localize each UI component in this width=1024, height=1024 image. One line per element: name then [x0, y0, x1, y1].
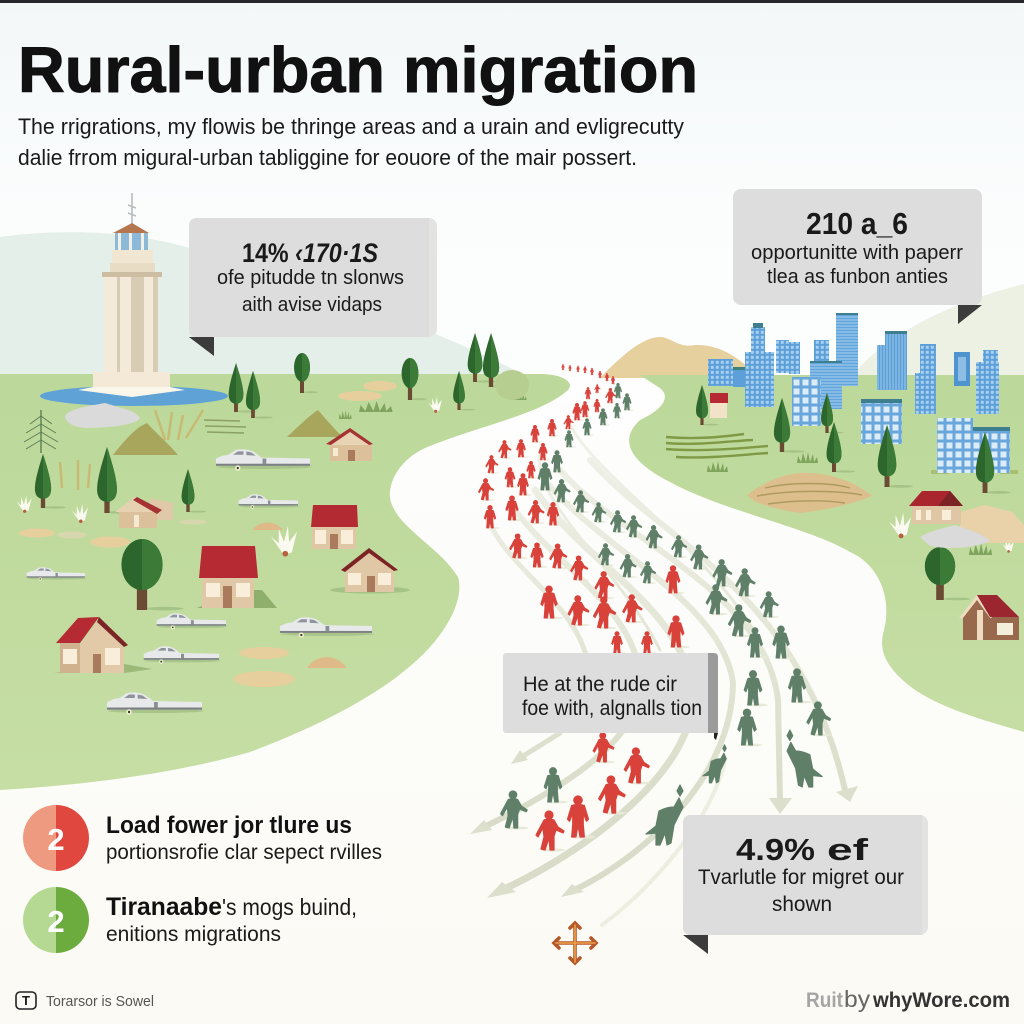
- top edge bar: [0, 0, 1024, 3]
- city trees: [696, 385, 1011, 600]
- legend: green text: 's mogs buind,: [222, 894, 357, 920]
- left pale hill: [0, 232, 530, 378]
- house gable left: [54, 617, 152, 673]
- right pale hill: [850, 284, 1024, 378]
- red migrants group: [478, 364, 690, 852]
- callout: rural stat: 14% ‹170·1S: [242, 238, 378, 268]
- footer brand: by: [844, 986, 871, 1012]
- legend: green marker: 2: [47, 904, 65, 939]
- rural trees: [35, 333, 514, 610]
- legend: green text: enitions migrations: [106, 923, 281, 946]
- large shrub: [495, 370, 529, 400]
- subtitle: [18, 114, 684, 170]
- tower shaft: [78, 250, 185, 397]
- hay piles: [113, 410, 343, 455]
- callout: rural stat: [189, 218, 437, 356]
- house small city: [710, 393, 728, 418]
- house small gable: [326, 428, 373, 461]
- callout: urban stat: tlea as funbon anties: [767, 266, 948, 288]
- house red roof large: [197, 546, 277, 608]
- footer brand: [806, 986, 1010, 1012]
- callout: mid flow note: [503, 653, 718, 740]
- house red roof medium: [311, 505, 358, 549]
- tower pool: [40, 386, 228, 406]
- arrow heads: [470, 750, 858, 898]
- legend: green marker: [23, 887, 89, 953]
- callout: urban stat: [733, 189, 982, 324]
- grey boulder city: [920, 525, 990, 548]
- legend: red text: Load fower jor tlure us: [106, 812, 352, 839]
- grey boulder: [65, 403, 140, 428]
- grass tufts and sprouts: [16, 393, 527, 557]
- footer brand: Ruit: [806, 989, 843, 1012]
- footer source icon: [16, 992, 36, 1009]
- tower lantern: [113, 223, 149, 250]
- urban green land: [629, 375, 1024, 732]
- reeds: [60, 410, 203, 490]
- callout: urban stat: 210 a_6: [806, 206, 908, 241]
- callout: destination stat: Tvarlutle for migret our: [698, 866, 904, 889]
- footer source text: Torarsor is Sowel: [46, 993, 154, 1010]
- green migrants group: [501, 383, 831, 845]
- legend: red text: portionsrofie clar sepect rvilles: [106, 841, 382, 864]
- legend: red marker: [23, 805, 89, 871]
- callout: destination stat: 4.9%: [736, 832, 815, 867]
- fern tree: [24, 410, 58, 453]
- tan distant hill: [600, 337, 760, 378]
- footer source icon: T: [22, 993, 30, 1008]
- legend: green text: Tiranaabe: [106, 893, 222, 921]
- house tan: [115, 497, 173, 528]
- green terraces: [666, 434, 768, 457]
- tower spire: [128, 193, 136, 224]
- grass tufts city: [707, 452, 1014, 555]
- orange cross marker: [554, 923, 596, 963]
- rural green land: [0, 374, 570, 790]
- legend: green text: [106, 893, 357, 946]
- tan rock: [960, 505, 1024, 543]
- city buildings: [708, 313, 1018, 474]
- subtitle: dalie frrom migural-urban tabliggine for eouore of the mair possert.: [18, 145, 637, 170]
- legend: red marker: 2: [47, 822, 65, 857]
- callout: mid flow note: foe with, algnalls tion: [522, 697, 702, 720]
- house gable right: [330, 548, 410, 594]
- tan terraced field: [747, 473, 872, 513]
- tower landmark: [40, 193, 228, 406]
- callout: destination stat: shown: [772, 893, 832, 916]
- callout: rural stat: aith avise vidaps: [242, 294, 382, 316]
- callout: destination stat: ef: [827, 832, 869, 867]
- callout: rural stat: ofe pitudde tn slonws: [217, 267, 404, 289]
- crop lines: [204, 420, 246, 433]
- rural cars: [27, 449, 374, 715]
- legend: red text: [106, 812, 382, 864]
- callout: destination stat: [683, 815, 928, 954]
- house red roof city right: [909, 491, 963, 524]
- callout: mid flow note: He at the rude cir: [523, 673, 677, 696]
- house brown: [959, 595, 1019, 640]
- migration flow arrows: [482, 425, 845, 925]
- callout: urban stat: opportunitte with paperr: [751, 242, 963, 264]
- subtitle: The rrigrations, my flowis be thringe areas and a urain and evligrecutty: [18, 114, 684, 139]
- footer brand: whyWore.com: [872, 989, 1010, 1012]
- title: Rural-urban migration: [18, 34, 698, 106]
- sand patches: [19, 381, 397, 687]
